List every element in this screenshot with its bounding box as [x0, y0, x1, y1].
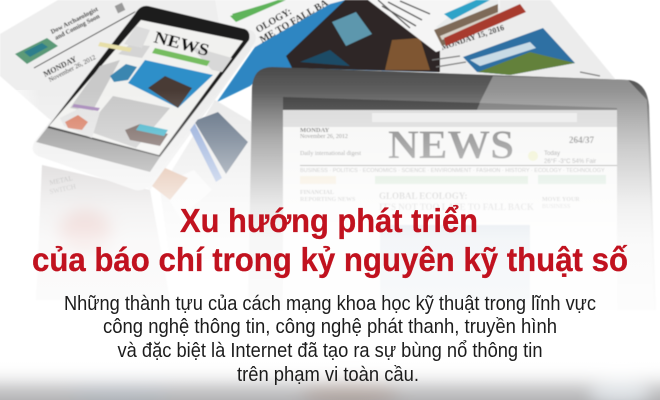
- tablet: November 26, 2012: [300, 134, 348, 140]
- newspaper: top left sheet: [0, 0, 260, 190]
- intro paragraph: và đặc biệt là Internet đã tạo ra sự bùng nổ thông tin: [118, 340, 542, 362]
- intro paragraph: [64, 293, 596, 386]
- tablet: BUSINESS · POLITICS · ECONOMICS · SCIENCE · ENVIRONMENT · FASHION · HISTORY · ECOLOGY · TECHNOLOGY: [300, 168, 605, 174]
- tablet: 264/37: [569, 135, 595, 145]
- newspaper: centre sheet with blue photo: OLOGY:: [254, 6, 294, 36]
- tablet: 26°F -3°C 54% Fair: [544, 159, 596, 165]
- left edge fade: [0, 90, 40, 330]
- intro paragraph: trên phạm vi toàn cầu.: [237, 364, 419, 386]
- newspaper: right sheet with landscape photo: [432, 0, 616, 80]
- newspaper: lower left sheet: [36, 165, 170, 300]
- newspaper: top left sheet: MONDAY: [42, 54, 78, 79]
- phone screen: [49, 20, 243, 155]
- title: Xu hướng phát triển: [180, 202, 478, 239]
- tablet: Today: [544, 151, 560, 157]
- tablet bezel: [248, 67, 656, 310]
- newspaper: centre sheet with blue photo: [215, 0, 440, 102]
- newspaper: top left sheet: and Coming Soon: [54, 13, 101, 42]
- newspaper: right sheet with landscape photo: MONDAY 15, 2016: [440, 23, 505, 52]
- lower photo colour washes: [0, 212, 660, 400]
- newspaper: lower left sheet: SWITCH: [49, 183, 77, 196]
- tablet: FINANCIAL: [300, 190, 334, 196]
- phone news masthead: NEWS: [152, 28, 212, 60]
- tablet screen: [283, 110, 617, 310]
- tablet news masthead: NEWS: [388, 122, 514, 167]
- tablet: GLOBAL ECOLOGY:: [379, 191, 467, 201]
- title: [32, 202, 628, 278]
- magazine roll: [368, 0, 526, 52]
- tablet: MOVE YOUR: [542, 197, 580, 203]
- newspaper: top left sheet: Dow Archaeologist: [50, 6, 100, 36]
- newspaper: top left sheet: November 26, 2012: [48, 54, 97, 84]
- newspaper: calculator sheet: [152, 100, 252, 260]
- title: của báo chí trong kỷ nguyên kỹ thuật số: [32, 241, 628, 278]
- phone body: [33, 5, 256, 190]
- tablet: BUSINESS: [542, 204, 570, 210]
- tablet: IT'S NOT TOO LATE TO FALL BACK: [379, 202, 534, 212]
- tablet: [248, 67, 656, 310]
- newspaper: lower left sheet: METAL: [49, 174, 73, 187]
- intro paragraph: Những thành tựu của cách mạng khoa học kỹ thuật trong lĩnh vực: [64, 293, 596, 315]
- tablet: REPORTING NEWS: [300, 197, 356, 203]
- tablet status bar: [283, 97, 480, 110]
- tablet: MONDAY: [300, 127, 330, 134]
- phone: [33, 5, 256, 190]
- tablet: Daily international digest: [300, 151, 361, 157]
- phone text blocks: [70, 60, 120, 112]
- intro paragraph: công nghệ thông tin, công nghệ phát thanh, truyền hình: [103, 316, 557, 338]
